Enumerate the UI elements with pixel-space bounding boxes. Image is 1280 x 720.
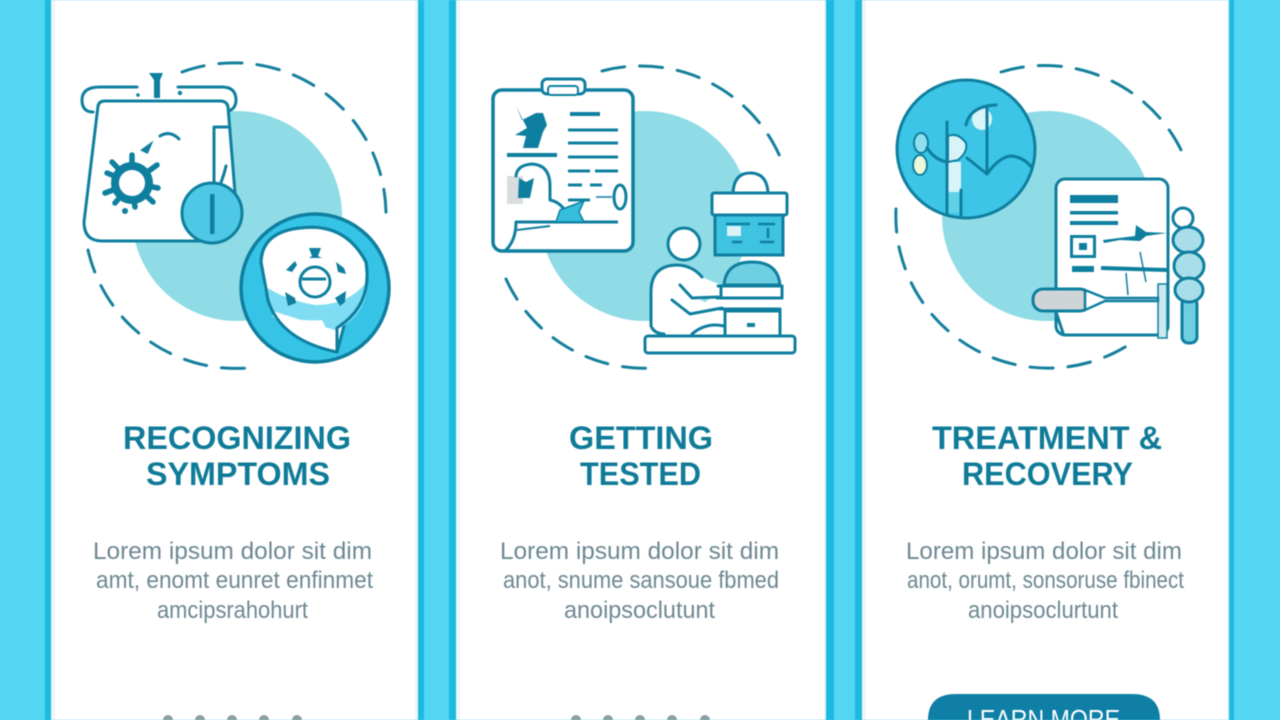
panel: recognizing symptoms xyxy=(45,0,424,720)
pen xyxy=(1033,289,1158,333)
body text xyxy=(93,538,373,624)
heading xyxy=(932,420,1162,492)
person xyxy=(651,228,726,335)
body text: anoipsoclurtunt xyxy=(968,597,1118,624)
icon: bag with virus xyxy=(82,73,242,243)
icon: virus xyxy=(105,155,158,214)
heading: TREATMENT & xyxy=(932,420,1162,456)
clipboard text lines xyxy=(507,114,618,222)
icon: person at machine xyxy=(645,173,795,353)
heading: TESTED xyxy=(580,456,701,492)
panel card xyxy=(855,0,1234,720)
heading: GETTING xyxy=(569,420,713,456)
body text: Lorem ipsum dolor sit dim xyxy=(93,538,372,565)
dashed ring xyxy=(88,63,386,368)
body text: amt, enomt eunret enfinmet xyxy=(96,567,373,594)
panel card xyxy=(449,0,834,720)
teal background circle xyxy=(540,111,750,321)
icon: magnified cell xyxy=(241,214,389,362)
dashed ring xyxy=(506,66,783,368)
heading: RECOGNIZING xyxy=(123,420,351,456)
icon: small circle badge xyxy=(182,166,242,243)
heading: RECOVERY xyxy=(962,456,1133,492)
pagination dots xyxy=(163,715,302,720)
panel: getting tested xyxy=(449,0,834,720)
icon: clipboard xyxy=(493,79,633,251)
pagination dots xyxy=(571,715,710,720)
button: learn more xyxy=(928,694,1160,720)
teal background circle xyxy=(942,111,1152,321)
body text xyxy=(906,538,1184,624)
heading xyxy=(569,420,713,492)
panel: treatment and recovery xyxy=(855,0,1234,720)
heading: SYMPTOMS xyxy=(146,456,330,492)
teal background circle xyxy=(132,111,342,321)
body text: anoipsoclutunt xyxy=(564,597,715,624)
heading xyxy=(123,420,351,492)
machine top box xyxy=(712,173,787,255)
body text: Lorem ipsum dolor sit dim xyxy=(500,538,779,565)
body text: amcipsrahohurt xyxy=(157,597,308,624)
dashed ring xyxy=(896,66,1183,368)
clipboard figure xyxy=(515,106,547,148)
body text xyxy=(500,538,779,624)
body text: Lorem ipsum dolor sit dim xyxy=(906,538,1182,565)
icon: swab circle xyxy=(897,80,1035,218)
icon: document with hand xyxy=(1033,179,1204,343)
body text: anot, orumt, sonsoruse fbinect xyxy=(907,567,1184,594)
machine base xyxy=(645,262,795,353)
body text: anot, snume sansoue fbmed xyxy=(503,567,779,594)
panel card xyxy=(45,0,424,720)
hand xyxy=(1158,208,1204,343)
document lines xyxy=(1070,195,1118,272)
